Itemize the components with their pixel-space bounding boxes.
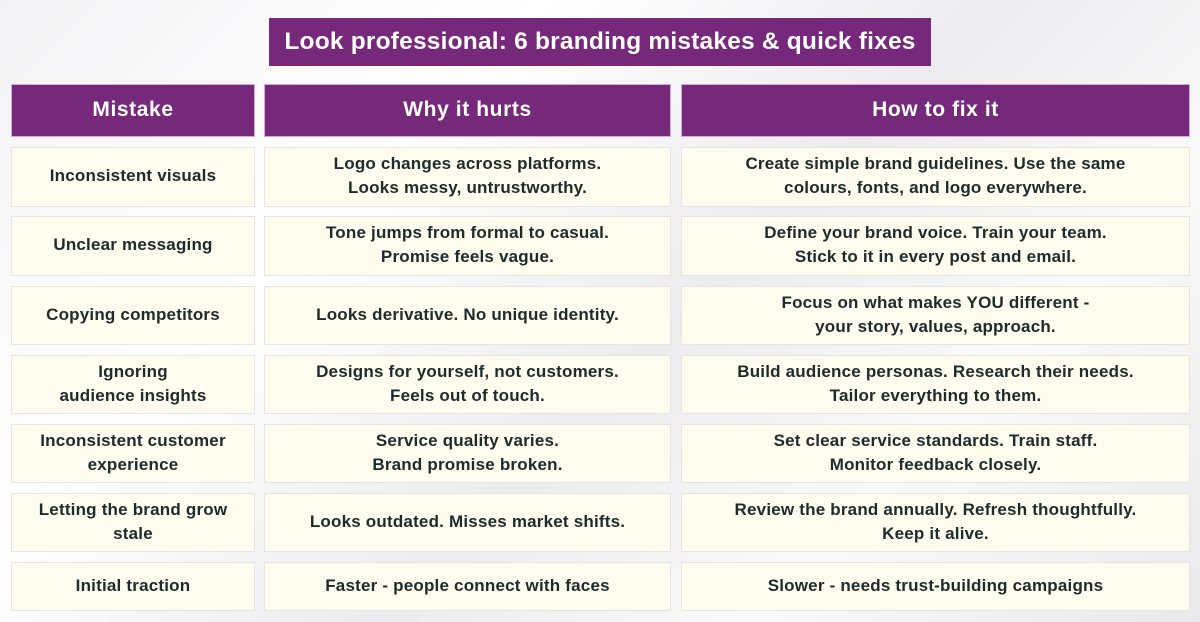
header: mistake: Mistake — [92, 98, 174, 121]
row 5 mistake — [11, 424, 255, 483]
row 6 fix: Review the brand annually. Refresh thoughtfully. — [735, 500, 1136, 518]
row 3 fix: Focus on what makes YOU different - — [781, 292, 1090, 312]
row 5 mistake: Inconsistent customer — [40, 430, 226, 450]
row 5 why: Service quality varies. — [376, 430, 559, 450]
row 2 mistake: Unclear messaging — [53, 235, 213, 254]
row 1 why — [264, 147, 671, 207]
header: mistake — [11, 84, 255, 137]
row 1 fix: colours, fonts, and logo everywhere. — [784, 178, 1087, 197]
row 7 fix — [681, 562, 1190, 611]
row 5 why: Brand promise broken. — [372, 454, 563, 474]
header: how to fix it — [681, 84, 1190, 137]
row 4 fix — [681, 355, 1190, 414]
title: Look professional: 6 branding mistakes & quick fixes — [284, 28, 916, 55]
header: why it hurts: Why it hurts — [403, 98, 532, 121]
row 3 fix: your story, values, approach. — [815, 316, 1056, 336]
row 7 why: Faster - people connect with faces — [325, 576, 610, 594]
row 5 fix: Set clear service standards. Train staff. — [774, 430, 1097, 450]
row 6 why: Looks outdated. Misses market shifts. — [310, 512, 625, 530]
row 3 why: Looks derivative. No unique identity. — [316, 304, 619, 324]
row 4 fix: Build audience personas. Research their needs. — [737, 362, 1134, 380]
row 5 why — [264, 424, 671, 483]
row 4 why: Feels out of touch. — [390, 386, 545, 404]
row 5 fix — [681, 424, 1190, 483]
header: why it hurts — [264, 84, 671, 137]
header: how to fix it: How to fix it — [872, 98, 999, 121]
row 1 why: Logo changes across platforms. — [334, 154, 601, 173]
row 5 mistake: experience — [88, 454, 178, 474]
row 7 why — [264, 562, 671, 611]
row 1 why: Looks messy, untrustworthy. — [348, 178, 587, 197]
row 6 fix — [681, 493, 1190, 552]
row 3 fix — [681, 286, 1190, 345]
row 6 mistake — [11, 493, 255, 552]
row 4 mistake — [11, 355, 255, 414]
row 2 why: Tone jumps from formal to casual. — [326, 223, 609, 242]
row 1 mistake — [11, 147, 255, 207]
row 2 fix: Define your brand voice. Train your team. — [764, 223, 1107, 242]
row 6 fix: Keep it alive. — [882, 524, 989, 542]
row 1 fix: Create simple brand guidelines. Use the same — [745, 154, 1126, 173]
row 7 fix: Slower - needs trust-building campaigns — [768, 576, 1103, 594]
row 1 mistake: Inconsistent visuals — [50, 166, 216, 185]
row 6 mistake: Letting the brand grow — [39, 500, 227, 518]
row 6 why — [264, 493, 671, 552]
row 3 mistake: Copying competitors — [46, 304, 220, 324]
row 4 mistake: Ignoring — [98, 362, 168, 380]
row 4 fix: Tailor everything to them. — [830, 386, 1041, 404]
row 2 why: Promise feels vague. — [381, 247, 554, 266]
row 4 mistake: audience insights — [60, 386, 206, 404]
row 6 mistake: stale — [113, 524, 153, 542]
title — [269, 18, 931, 66]
row 5 fix: Monitor feedback closely. — [830, 454, 1041, 474]
row 4 why — [264, 355, 671, 414]
row 7 mistake — [11, 562, 255, 611]
row 2 fix — [681, 216, 1190, 276]
row 2 why — [264, 216, 671, 276]
row 3 why — [264, 286, 671, 345]
row 7 mistake: Initial traction — [76, 576, 190, 594]
row 2 mistake — [11, 216, 255, 276]
row 3 mistake — [11, 286, 255, 345]
row 4 why: Designs for yourself, not customers. — [316, 362, 619, 380]
row 1 fix — [681, 147, 1190, 207]
row 2 fix: Stick to it in every post and email. — [795, 247, 1076, 266]
